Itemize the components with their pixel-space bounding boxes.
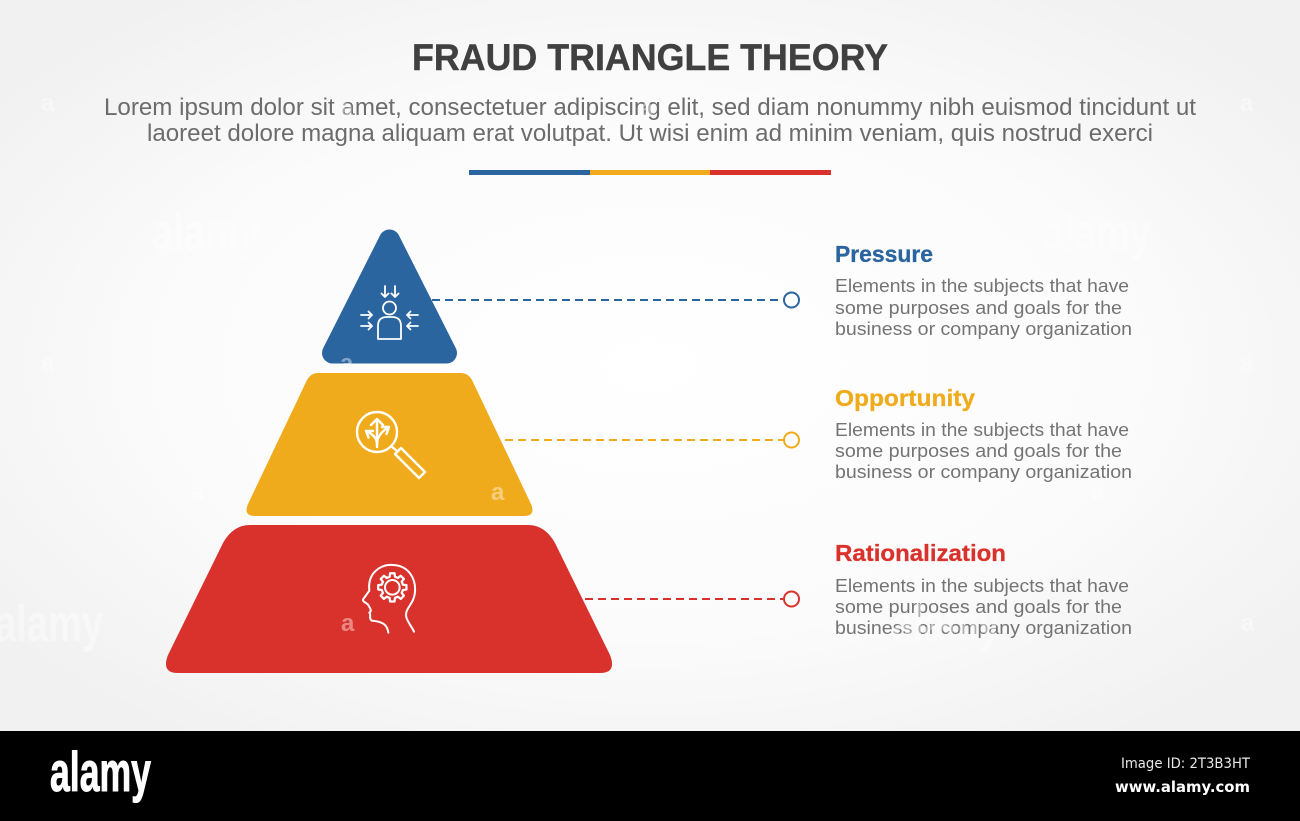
icon: magnifier with arrows — [357, 412, 425, 478]
text block: opportunity: some purposes and goals for the — [835, 441, 1122, 461]
subtitle text block — [104, 94, 1196, 147]
footer image id: Image ID: 2T3B3HT — [1121, 756, 1250, 772]
watermark overlay: a — [1241, 610, 1255, 637]
text block: rationalization: Elements in the subjects that have — [835, 576, 1129, 596]
text block: pressure: some purposes and goals for the — [835, 298, 1122, 318]
tri-colour divider — [469, 170, 831, 175]
text block: rationalization: Rationalization — [835, 540, 1006, 566]
icon: person under pressure — [361, 286, 418, 339]
connector: pressure — [432, 292, 799, 308]
text block: pressure: business or company organization — [835, 319, 1132, 339]
text block: rationalization: some purposes and goals for the — [835, 597, 1122, 617]
watermark overlay: a — [41, 90, 55, 117]
watermark overlay: alamy — [892, 595, 1000, 653]
watermark overlay: a — [640, 95, 654, 122]
connector: rationalization — [585, 592, 799, 606]
footer logo: alamy — [50, 740, 151, 803]
text block: pressure: Pressure — [835, 241, 933, 267]
connector: opportunity — [505, 432, 799, 448]
watermark overlay: a — [491, 479, 505, 506]
watermark overlay: a — [791, 479, 805, 506]
pyramid tier: rationalization — [166, 525, 612, 673]
watermark overlay: a — [191, 479, 205, 506]
footer bar — [0, 731, 1300, 821]
text block: rationalization — [835, 540, 1132, 638]
watermark overlay: alamy — [152, 204, 260, 262]
watermark overlay — [0, 90, 1255, 653]
watermark overlay: a — [340, 95, 354, 122]
watermark overlay: a — [341, 610, 355, 637]
pyramid tier: pressure — [332, 240, 446, 353]
text block: pressure — [835, 241, 1132, 339]
text block: opportunity — [835, 385, 1132, 482]
pyramid tier: opportunity — [247, 373, 532, 516]
text block: opportunity: Opportunity — [835, 385, 975, 411]
watermark overlay: a — [1091, 479, 1105, 506]
watermark overlay: a — [41, 350, 55, 377]
icon: head with gear — [363, 565, 415, 633]
footer url: www.alamy.com — [1115, 778, 1250, 796]
text block: opportunity: business or company organization — [835, 462, 1132, 482]
watermark overlay: a — [640, 350, 654, 377]
subtitle text block: Lorem ipsum dolor sit amet, consectetuer adipiscing elit, sed diam nonummy nibh euismod tincidunt ut — [104, 94, 1196, 121]
text block: rationalization: business or company organization — [835, 618, 1132, 638]
watermark overlay: a — [1240, 90, 1254, 117]
text block: opportunity: Elements in the subjects that have — [835, 420, 1129, 440]
watermark overlay: a — [641, 610, 655, 637]
watermark overlay: a — [340, 350, 354, 377]
subtitle text block: laoreet dolore magna aliquam erat volutpat. Ut wisi enim ad minim veniam, quis nostrud exerci — [147, 120, 1153, 147]
watermark overlay: a — [1240, 350, 1254, 377]
text block: pressure: Elements in the subjects that have — [835, 276, 1129, 296]
watermark overlay: alamy — [1043, 204, 1151, 262]
watermark overlay: a — [941, 610, 955, 637]
title: FRAUD TRIANGLE THEORY — [412, 37, 888, 78]
